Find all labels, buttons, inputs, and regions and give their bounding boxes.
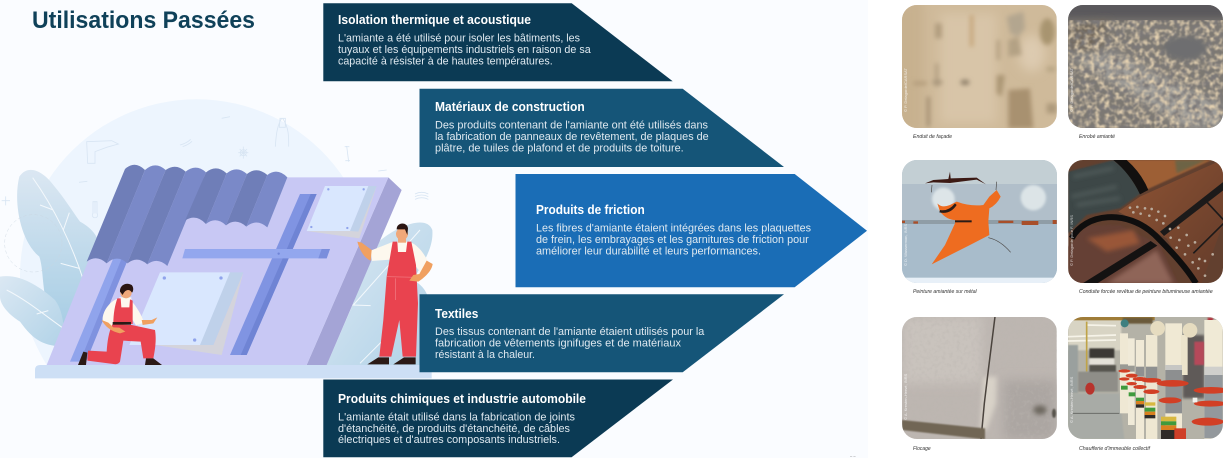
heading: Textiles (435, 307, 478, 321)
upper plate (307, 186, 377, 238)
photo credit: © P. Delagarde/CARSAT (903, 68, 908, 112)
right leaf (327, 222, 432, 365)
heading: Isolation thermique et acoustique (338, 13, 531, 27)
left leaves (0, 170, 100, 347)
photo credit: © P. Delagarde pour F. INRS (1069, 215, 1074, 266)
body text: plâtre, de tuiles de plafond et de produits de toiture. (435, 142, 684, 154)
body text: Des produits contenant de l'amiante ont été utilisés dans (435, 119, 708, 131)
body text (435, 119, 709, 154)
slide footer mark: – – (850, 453, 856, 458)
caption: Chaufferie d'immeuble collectif (1079, 446, 1151, 452)
body text: électriques et d'autres composants industriels. (338, 434, 560, 446)
photo: enrobé amianté (1068, 5, 1223, 128)
photo credit: © D. Wasserman, INRS (903, 224, 908, 266)
wall panel side (307, 177, 402, 365)
body text: la fabrication de panneaux de revêtement, de plaques de (435, 131, 709, 143)
photo: conduite forcée (1068, 160, 1224, 283)
body text: résistant à la chaleur. (435, 349, 535, 361)
body text: tuyaux et les équipements industriels en raison de sa (338, 44, 592, 56)
body text: Les fibres d'amiante étaient intégrées dans les plaquettes (536, 222, 811, 234)
caption: Enrobé amianté (1079, 134, 1115, 140)
panel: matériaux de construction (420, 89, 784, 167)
body text: de frein, les embrayages et les garnitures de friction pour (536, 234, 809, 246)
panel: isolation thermique et acoustique (323, 3, 673, 81)
body text: L'amiante était utilisé dans la fabrication de joints (338, 411, 575, 423)
red flanges (1118, 369, 1226, 426)
photo credit: © A. Kresten-Hervé, INRS (903, 373, 908, 420)
corrugated roof sheets (87, 165, 287, 266)
photo: flocage (902, 317, 1057, 439)
wall panel face (47, 177, 388, 365)
body text: d'étanchéité, de produits d'étanchéité, de câbles (338, 423, 570, 435)
caption: Enduit de façade (913, 134, 952, 140)
heading: Produits chimiques et industrie automobile (338, 392, 586, 406)
kneeling worker (78, 284, 162, 365)
body text (536, 222, 811, 258)
collars (1120, 364, 1128, 370)
body text: améliorer leur durabilité et leurs performances. (536, 246, 761, 258)
heading: Produits de friction (536, 203, 645, 217)
body text (338, 411, 575, 446)
body text (435, 326, 705, 361)
right background (1183, 335, 1204, 398)
insulated pipes with flanges (1118, 320, 1226, 439)
faint tool icons (2, 117, 428, 218)
slide background (0, 0, 868, 458)
panel: textiles (420, 294, 784, 372)
photo: chaufferie d'immeuble collectif (1068, 317, 1226, 439)
background circle (20, 99, 373, 365)
panel: produits de friction (516, 174, 867, 287)
base ledge (35, 365, 432, 378)
body text: capacité à résister à de hautes températures. (338, 55, 553, 67)
photo credit: © P. Delagarde/CARSAT (1069, 68, 1074, 112)
horizontal beam (182, 249, 330, 258)
caption: Peinture amiantée sur métal (913, 289, 977, 295)
illustration: workers installing asbestos roofing panel (0, 99, 433, 378)
photo credit: © A. Kresten-Hervé, INRS (1069, 376, 1074, 423)
body text: L'amiante a été utilisé pour isoler les bâtiments, les (338, 33, 580, 45)
body text: Des tissus contenant de l'amiante étaient utilisés pour la (435, 326, 705, 338)
colour bands (1121, 386, 1128, 390)
body text (338, 33, 592, 67)
diagonal beam (230, 194, 317, 355)
heading: Matériaux de construction (435, 100, 585, 114)
panel: produits chimiques et industrie automobile (323, 380, 673, 457)
left beam (70, 258, 128, 362)
caption: Flocage (913, 446, 931, 452)
photo: peinture amiantée sur métal (902, 160, 1057, 284)
lower plate (129, 272, 243, 355)
title: Utilisations Passées (32, 7, 255, 34)
caption: Conduite forcée revêtue de peinture bitumineuse amiantée (1079, 289, 1213, 295)
standing worker (357, 223, 433, 364)
body text: fabrication de vêtements ignifuges et de matériaux (435, 338, 681, 350)
photo: enduit de façade (902, 5, 1057, 128)
